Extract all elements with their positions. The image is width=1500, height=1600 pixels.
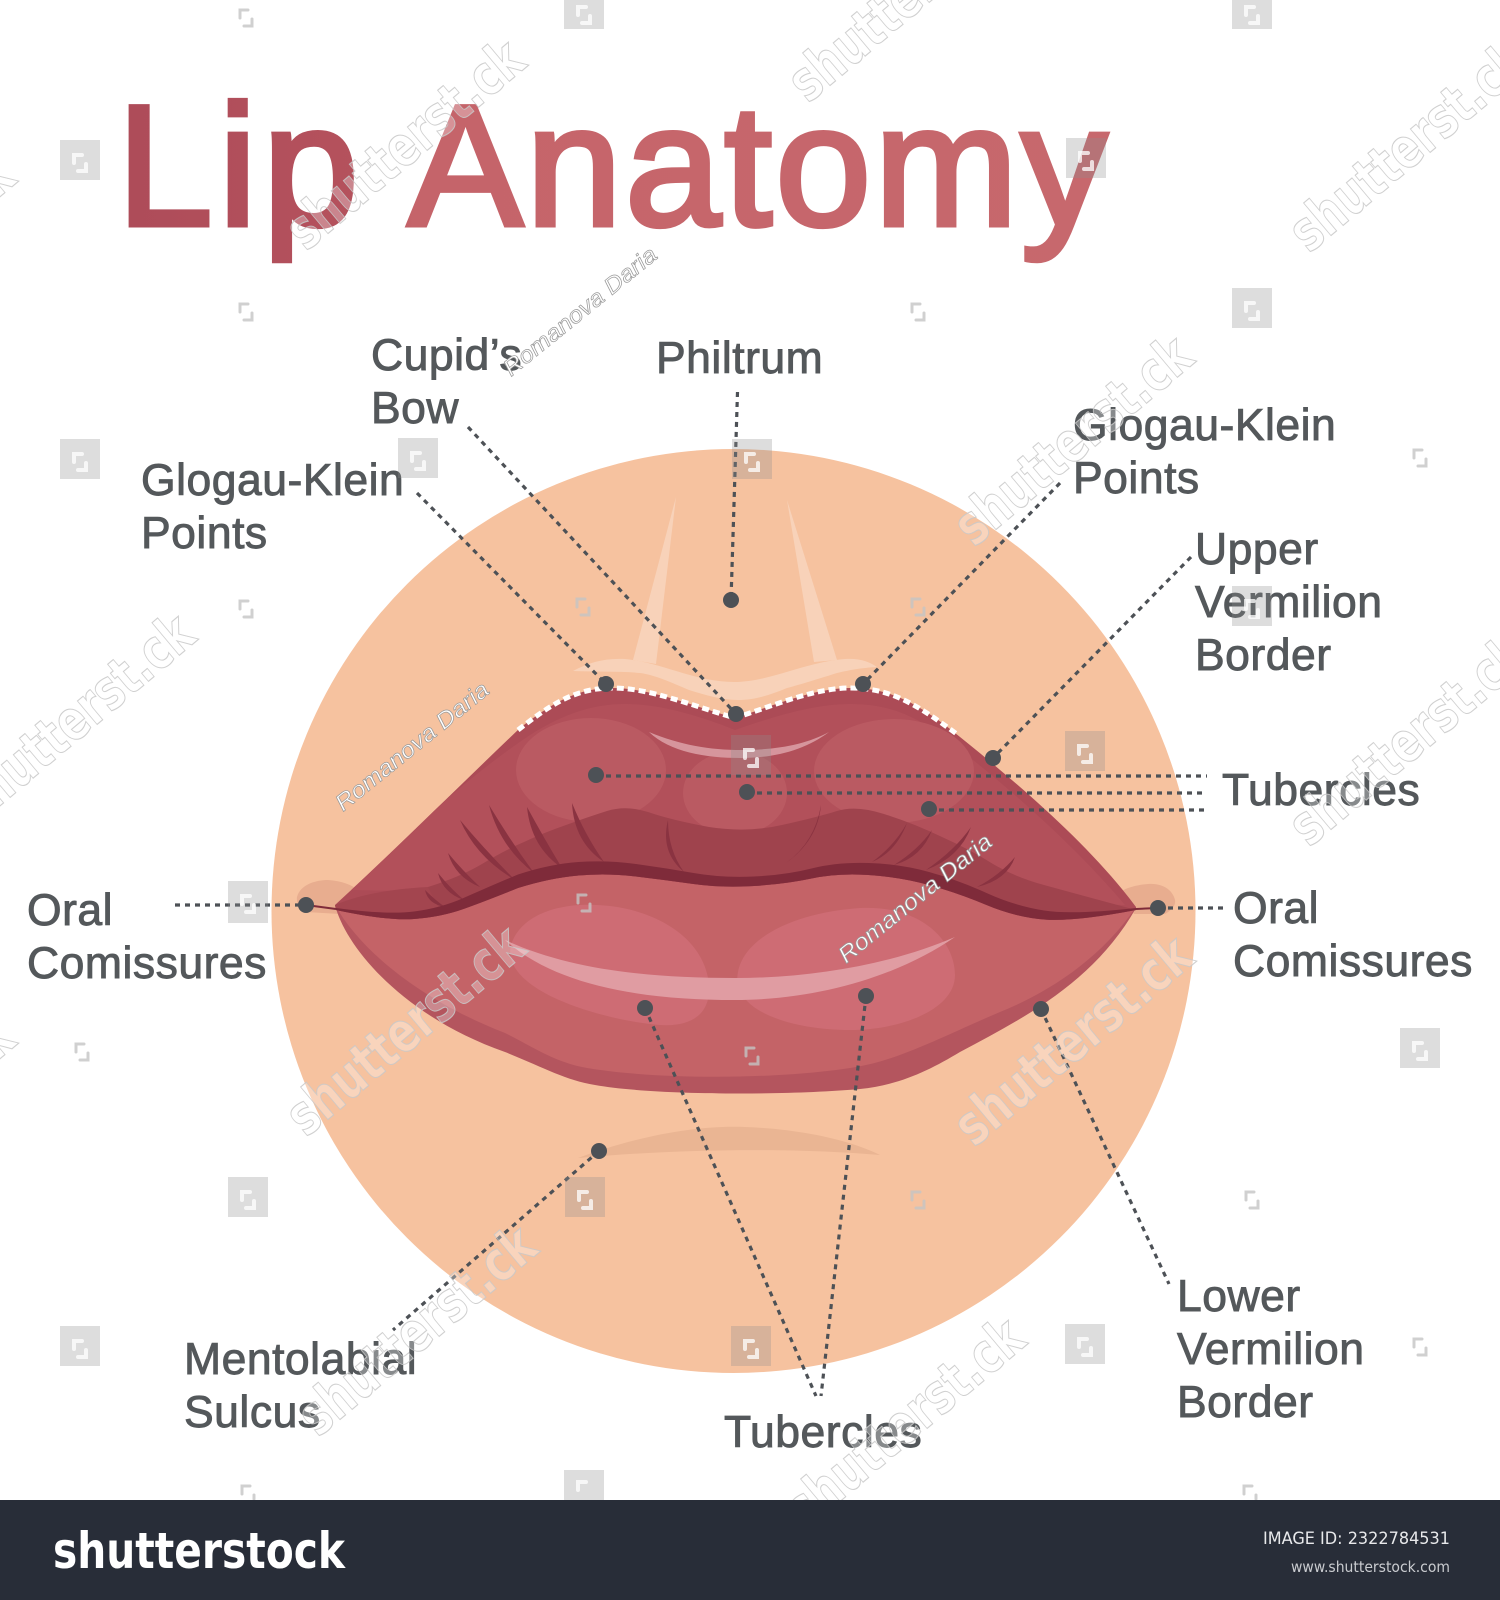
label: Upper Vermilion Border: Border <box>1195 631 1332 680</box>
label: Oral Comissures left: Oral <box>27 886 113 935</box>
label: Oral Comissures left: Comissures <box>27 939 267 988</box>
lip creases <box>425 803 1015 907</box>
stock watermark text: shutterst.ck <box>273 912 538 1149</box>
mentolabial sulcus shadow <box>578 1127 880 1158</box>
stock watermark text: shutterst.ck <box>941 922 1206 1159</box>
lower lip <box>336 874 1134 1094</box>
stock watermark text: shutterst.ck <box>941 322 1206 559</box>
label: Upper Vermilion Border: Vermilion <box>1195 578 1383 627</box>
label: Tubercles lower: Tubercles <box>724 1408 922 1457</box>
footer logo: shutterstock <box>53 1522 346 1580</box>
philtrum ridges <box>573 497 877 700</box>
footer website: www.shutterstock.com <box>1291 1558 1450 1576</box>
lower highlight <box>505 937 955 1000</box>
lower lip inner <box>320 870 1150 1077</box>
label: Mentolabial Sulcus: Mentolabial <box>184 1335 417 1384</box>
upper highlight <box>649 732 829 758</box>
label: Glogau-Klein Points left: Glogau-Klein <box>141 456 404 505</box>
label: Cupid's Bow: Cupid’s <box>371 331 522 380</box>
upper lip lower shaded band <box>428 808 1136 912</box>
label: Philtrum: Philtrum <box>656 334 823 383</box>
mouth line <box>306 861 1158 920</box>
label: Glogau-Klein Points left: Points <box>141 509 268 558</box>
corner shading upper left <box>335 887 427 910</box>
footer bar <box>0 1500 1500 1600</box>
label: Lower Vermilion Border: Border <box>1177 1378 1314 1427</box>
title: Lip <box>117 70 365 262</box>
upper lip <box>335 688 1136 920</box>
stock watermark text: shutterst.ck <box>773 1304 1038 1541</box>
upper lip inner tone <box>351 802 444 890</box>
label: Oral Comissures right: Comissures <box>1233 937 1473 986</box>
label: Glogau-Klein Points right: Glogau-Klein <box>1073 401 1336 450</box>
mouth corner shadows <box>297 880 1175 914</box>
contributor watermark text: Romanova Daria <box>833 828 997 968</box>
upper tubercle centre <box>683 756 787 830</box>
label: Mentolabial Sulcus: Sulcus <box>184 1388 321 1437</box>
footer image id: IMAGE ID: 2322784531 <box>1263 1529 1450 1549</box>
title: Anatomy <box>408 70 1111 262</box>
upper tubercle left <box>516 718 666 822</box>
label: Lower Vermilion Border: Vermilion <box>1177 1325 1365 1374</box>
label: Upper Vermilion Border: Upper <box>1195 525 1319 574</box>
upper tubercle right <box>814 719 974 823</box>
face circle <box>272 449 1196 1373</box>
label: Lower Vermilion Border: Lower <box>1177 1272 1301 1321</box>
label: Tubercles upper: Tubercles <box>1222 766 1420 815</box>
label: Cupid's Bow: Bow <box>371 384 459 433</box>
label: Oral Comissures right: Oral <box>1233 884 1319 933</box>
lower tubercle right <box>737 908 955 1030</box>
label: Glogau-Klein Points right: Points <box>1073 454 1200 503</box>
contributor watermark text: Romanova Daria <box>498 241 662 381</box>
marker dots <box>298 592 1166 1159</box>
stock watermark text: shutterst.ck <box>285 1212 550 1449</box>
contributor watermark text: Romanova Daria <box>330 676 494 816</box>
leader lines <box>175 392 1224 1396</box>
upper vermilion border dashes <box>518 688 958 735</box>
lower tubercle left <box>510 905 709 1025</box>
contributor watermark text <box>330 241 997 968</box>
